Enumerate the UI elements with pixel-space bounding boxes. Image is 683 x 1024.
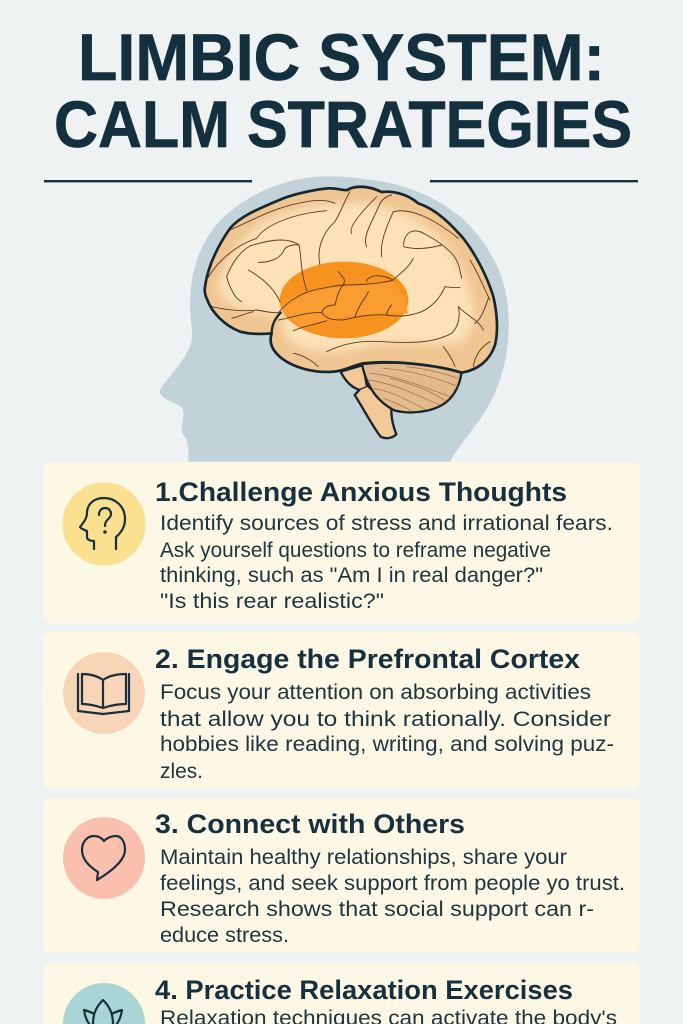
heading: 1.Challenge Anxious Thoughts: [155, 477, 567, 507]
panel: 2 engage the prefrontal cortex: [43, 632, 640, 789]
lighter cortex surface: [218, 203, 475, 352]
brain illustration with head silhouette: [160, 176, 509, 462]
panel: 1 challenge anxious thoughts: [43, 462, 640, 623]
panel: 4 practice relaxation exercises: [43, 963, 640, 1024]
heading: 4. Practice Relaxation Exercises: [155, 975, 573, 1005]
heading: 2. Engage the Prefrontal Cortex: [155, 644, 580, 674]
sulci folds: [208, 192, 490, 367]
body text: [160, 846, 625, 947]
body text: thinking, such as "Am I in real danger?": [160, 564, 543, 587]
icon: open book: [63, 652, 145, 734]
body text: Focus your attention on absorbing activities: [160, 681, 591, 704]
body text: feelings, and seek support from people yo trust.: [160, 872, 625, 895]
body text: zles.: [160, 760, 203, 783]
icon: head with question mark: [62, 482, 146, 566]
brain stem: [341, 365, 396, 438]
cerebrum outline: [205, 187, 497, 373]
icon: lotus: [63, 983, 145, 1024]
title: LIMBIC SYSTEM:: [78, 20, 605, 94]
body text: Ask yourself questions to reframe negative: [160, 539, 551, 562]
cerebellum: [362, 363, 462, 412]
body text: that allow you to think rationally. Consider: [160, 708, 611, 731]
body text: Research shows that social support can r-: [160, 898, 594, 921]
icon: heart speech bubble: [63, 817, 145, 899]
body text: Maintain healthy relationships, share your: [160, 846, 567, 869]
body text: Identify sources of stress and irrational fears.: [160, 512, 613, 535]
body text: [160, 681, 614, 783]
body text: hobbies like reading, writing, and solving puz-: [160, 733, 614, 756]
body text: "Is this rear realistic?": [160, 590, 384, 613]
title: [54, 20, 632, 161]
cerebrum: [205, 187, 497, 373]
title: CALM STRATEGIES: [54, 87, 632, 161]
body text: [160, 512, 613, 613]
body text: educe stress.: [160, 924, 289, 947]
highlighted limbic region: [280, 262, 408, 338]
panel: 3 connect with others: [43, 798, 640, 953]
head silhouette: [160, 176, 509, 462]
heading: 3. Connect with Others: [155, 809, 465, 839]
